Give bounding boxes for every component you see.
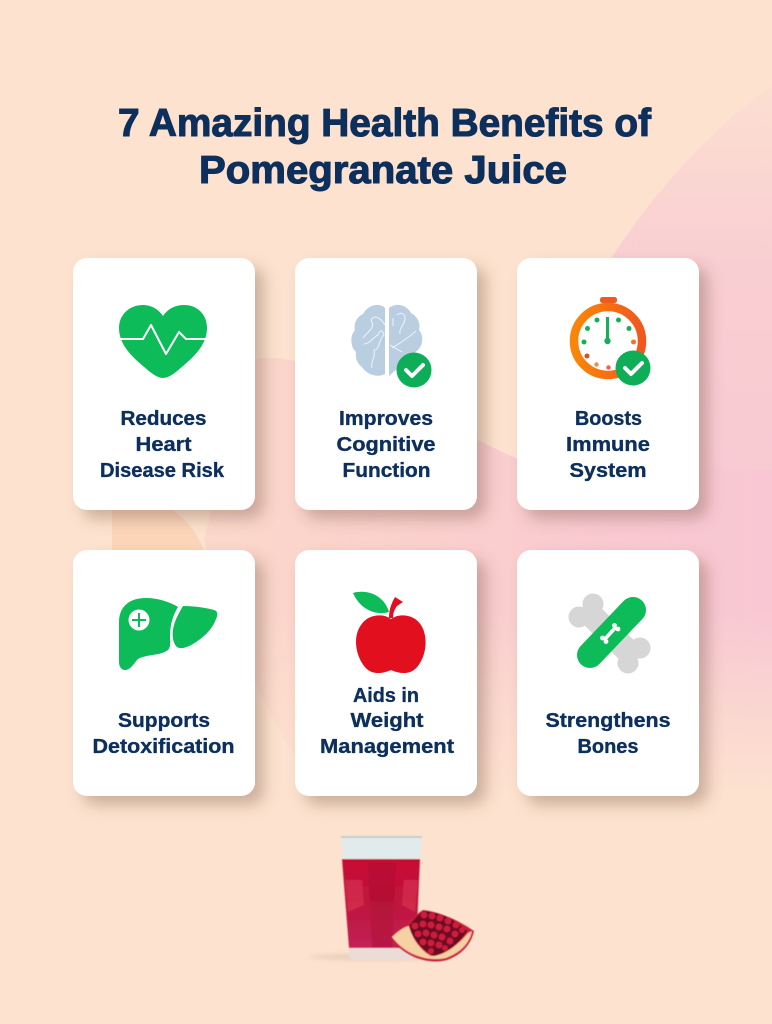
label	[336, 408, 436, 482]
label: Detoxification	[92, 736, 234, 758]
label: Strengthens	[546, 710, 670, 732]
ground shadow	[309, 954, 441, 960]
icon: brain with check	[351, 305, 432, 388]
card background	[295, 550, 477, 796]
glass	[341, 836, 422, 960]
panel: supports detoxification	[73, 550, 255, 796]
icon: liver	[119, 598, 217, 670]
panel: strengthens bones	[517, 550, 699, 796]
large pink circle right	[612, 129, 772, 470]
label	[546, 710, 670, 758]
label: Immune	[566, 434, 650, 456]
title: Pomegranate Juice	[199, 149, 567, 192]
icon: stopwatch with check	[574, 297, 650, 386]
label: Bones	[578, 736, 638, 758]
panel: reduces heart disease risk	[73, 258, 255, 510]
label	[92, 710, 234, 758]
background	[112, 129, 772, 746]
fade to peach at bottom	[277, 665, 772, 800]
label: Function	[342, 460, 430, 482]
panel: aids in weight management	[295, 550, 477, 796]
pink wave centre	[204, 358, 610, 734]
label: Supports	[118, 710, 210, 732]
orange blob	[112, 510, 204, 550]
label: Weight	[350, 710, 424, 732]
card background	[517, 258, 699, 510]
card background	[73, 258, 255, 510]
title: 7 Amazing Health Benefits of	[118, 102, 652, 145]
label: Improves	[339, 408, 433, 430]
label: Aids in	[353, 685, 419, 707]
label: Cognitive	[336, 434, 436, 456]
card background	[517, 550, 699, 796]
label: Heart	[136, 434, 192, 456]
icon: apple	[353, 592, 426, 673]
label: Disease Risk	[100, 460, 225, 482]
panel: boosts immune system	[517, 258, 699, 510]
label	[566, 408, 650, 482]
illustration: glass of pomegranate juice with fruit wedge	[309, 836, 474, 961]
label: System	[570, 460, 646, 482]
pomegranate wedge	[390, 910, 474, 961]
card background	[73, 550, 255, 796]
card background	[295, 258, 477, 510]
title	[118, 102, 652, 192]
panel: improves cognitive function	[295, 258, 477, 510]
icon: bone with bandage	[568, 594, 650, 674]
label	[320, 685, 454, 758]
icon: heart with pulse	[119, 305, 208, 378]
label: Reduces	[120, 408, 206, 430]
label: Management	[320, 736, 454, 758]
label: Boosts	[575, 408, 642, 430]
label	[100, 408, 225, 482]
